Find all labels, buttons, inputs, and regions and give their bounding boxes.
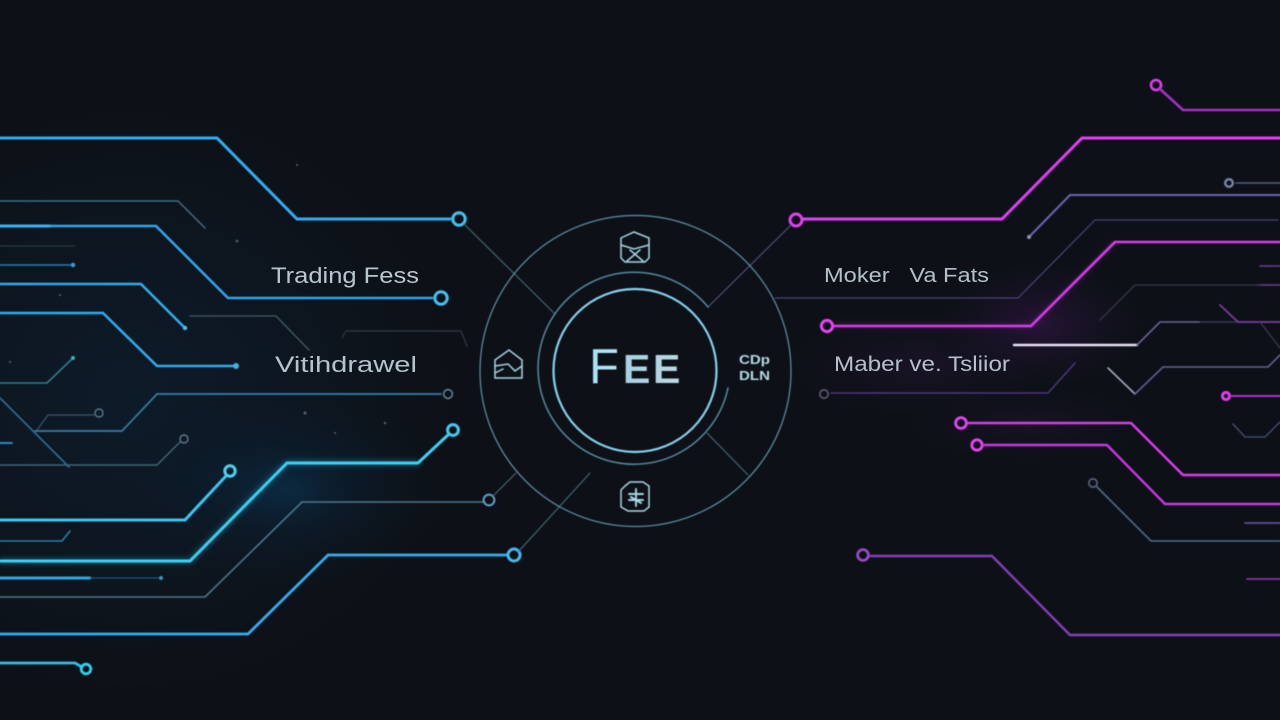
- glow: brightest line: [0, 463, 418, 561]
- trace: small node line: [1225, 179, 1280, 187]
- trace: top right node: [1151, 80, 1280, 110]
- trace: bottom line to node: [0, 663, 91, 674]
- trace: grey node line with faint end: [820, 363, 1075, 398]
- icon: top: [621, 232, 649, 262]
- trace: line 284 with end dot: [0, 284, 187, 330]
- trace: faint dark line: [1100, 285, 1260, 320]
- icon: left: [495, 350, 522, 378]
- trace: grey line to node 489: [0, 495, 494, 597]
- connector lines to hub: [464, 224, 791, 551]
- label: Vitihdrawal: Vitihdrawel: [275, 352, 417, 377]
- trace: violet line: [1027, 195, 1280, 239]
- trace: top main line to node: [0, 138, 465, 225]
- trace: magenta short diagonal: [1220, 305, 1280, 348]
- trace: short stub 579: [1247, 578, 1280, 580]
- icon: right text glyphs: [739, 352, 770, 383]
- trace: thin line 201: [0, 201, 205, 228]
- trace: V-shaped line: [1108, 355, 1280, 394]
- panel: left blue circuit traces: [0, 138, 520, 674]
- trace: main magenta line: [790, 138, 1280, 226]
- trace: short branch: [0, 531, 70, 541]
- trace: line with bright stub and dot: [0, 576, 163, 580]
- trace: line 220 faint: [775, 220, 1278, 298]
- trace: line 317: [190, 316, 309, 350]
- icon: right text glyphs: DLN: [739, 368, 770, 383]
- trace: short stubs: [1257, 266, 1280, 285]
- trace: white highlighted line: [1014, 322, 1238, 345]
- trace: small branch with node: [37, 409, 103, 430]
- trace: small hook: [1233, 422, 1280, 437]
- trace: bright line to node 230: [0, 466, 235, 520]
- outer ring: [480, 216, 791, 526]
- panel: right magenta circuit traces: [775, 80, 1280, 635]
- inner ring: [554, 289, 716, 452]
- trace: faint bracket near label: [342, 331, 467, 346]
- label: Trading Fess: Trading Fess: [271, 263, 419, 288]
- trace: small magenta node: [1222, 392, 1280, 400]
- trace: short stub 523: [1245, 522, 1280, 524]
- trace: small tick: [0, 442, 12, 444]
- trace: short faint line: [0, 245, 75, 247]
- trace: brightest line to node 453: [0, 425, 458, 561]
- trace: magenta line 445: [972, 440, 1280, 504]
- center label FEE: F: [589, 340, 619, 394]
- trace: magenta line 423: [956, 418, 1280, 475]
- hub: central fee circle: [480, 216, 791, 526]
- trace: second main line to node: [0, 226, 447, 304]
- middle arc ring: [538, 272, 728, 464]
- trace: diagonal line: [0, 398, 69, 467]
- center label FEE: E: [653, 346, 680, 392]
- trace: lower main line to node 514: [0, 549, 520, 634]
- trace: short line with dot: [0, 263, 75, 267]
- trace: line 313 with end dot: [0, 313, 239, 369]
- trace: long line to grey node: [35, 390, 452, 431]
- center label FEE: E: [623, 346, 650, 392]
- icon: right text glyphs: CDp: [739, 352, 770, 367]
- label: Maber ve. Tsliior: Maber ve. Tsliior: [834, 353, 1010, 376]
- trace: teal short branch: [0, 356, 75, 383]
- label: Moker Va Fats: Moker Va Fats: [824, 265, 989, 287]
- trace: purple lower line: [858, 550, 1280, 635]
- glow: lower magenta line: [835, 242, 1115, 326]
- trace: lower magenta line: [821, 242, 1280, 332]
- trace: grey blue line: [1089, 479, 1280, 541]
- icon: bottom: [621, 482, 649, 511]
- specks: [9, 164, 386, 434]
- trace: line 465 to node: [0, 435, 188, 465]
